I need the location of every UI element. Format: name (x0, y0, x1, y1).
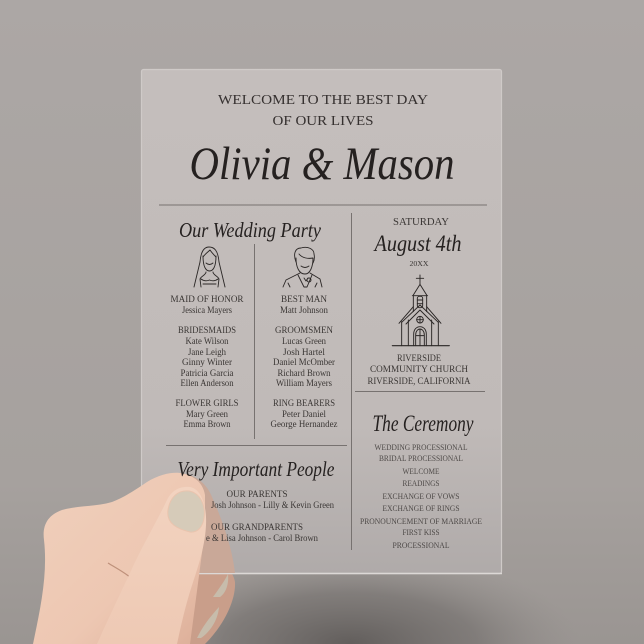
column: groom's side: Richard Brown (278, 368, 331, 378)
column: bride's side: Jessica Mayers (182, 305, 232, 315)
column: groom's side: Lucas Green (282, 336, 326, 346)
column: groom's side: Josh Hartel (283, 347, 326, 357)
heading: very important people: Very Important People (178, 457, 334, 481)
text: grandparents: OUR GRANDPARENTS (211, 522, 303, 532)
column: groom's side: BEST MAN (281, 294, 328, 304)
column: groom's side: Peter Daniel (282, 409, 326, 419)
back of hand (33, 473, 205, 644)
text: year: 20XX (410, 259, 429, 268)
column: groom's side: Matt Johnson (280, 305, 328, 315)
card shadow (120, 552, 580, 644)
text: venue: RIVERSIDE, CALIFORNIA (368, 376, 471, 386)
dividers (159, 205, 487, 550)
list: order of service: WELCOME (402, 467, 440, 476)
list: order of service: EXCHANGE OF VOWS (382, 492, 460, 501)
column: bride's side: Ellen Anderson (180, 378, 234, 388)
column: groom's side: William Mayers (276, 378, 332, 388)
fingers behind card (175, 563, 235, 644)
list: order of service: FIRST KISS (402, 528, 440, 537)
icon: groom (283, 247, 322, 287)
column: groom's side: GROOMSMEN (275, 325, 333, 335)
heading: welcome (218, 93, 428, 129)
panel: very important people (178, 457, 334, 543)
column: bride's side: Patricia Garcia (180, 368, 234, 378)
thumb (97, 487, 206, 644)
text: venue (368, 353, 471, 386)
knuckle crease (108, 563, 131, 578)
column: groom's side (270, 294, 338, 429)
column: bride's side: Ginny Winter (182, 357, 232, 367)
column: groom's side: Daniel McOmber (273, 357, 335, 367)
text: venue: COMMUNITY CHURCH (370, 364, 468, 374)
card bottom edge highlight (195, 572, 502, 574)
heading: the ceremony: The Ceremony (372, 411, 474, 436)
column: bride's side (170, 294, 244, 429)
heading: our wedding party: Our Wedding Party (179, 218, 322, 242)
icon: church (392, 275, 449, 346)
panel: the ceremony (360, 411, 482, 550)
column: bride's side: Kate Wilson (186, 336, 229, 346)
column: groom's side: George Hernandez (270, 419, 338, 429)
icon: bride (194, 247, 225, 287)
title: couple names: Olivia & Mason (190, 138, 454, 190)
acrylic card (142, 70, 502, 574)
column: bride's side: FLOWER GIRLS (176, 398, 238, 408)
column: bride's side: Emma Brown (184, 419, 231, 429)
column: groom's side: RING BEARERS (273, 398, 335, 408)
list: order of service: PROCESSIONAL (392, 541, 450, 550)
text: grandparents: e & Lisa Johnson - Carol Brown (206, 533, 318, 543)
finger seen through card (180, 473, 235, 573)
hand holding card (33, 473, 206, 644)
text: day: SATURDAY (393, 217, 449, 228)
column: bride's side: MAID OF HONOR (170, 294, 244, 304)
list: order of service (360, 443, 482, 550)
text: parents: OUR PARENTS (226, 489, 288, 499)
column: bride's side: BRIDESMAIDS (178, 325, 236, 335)
thumbnail (168, 491, 204, 532)
column: bride's side: Jane Leigh (188, 347, 226, 357)
list: order of service: READINGS (402, 479, 440, 488)
panel: wedding party (170, 218, 338, 429)
text: grandparents (206, 522, 318, 543)
column: bride's side: Mary Green (186, 409, 228, 419)
list: order of service: PRONOUNCEMENT OF MARRIAGE (360, 517, 482, 526)
heading: welcome: OF OUR LIVES (272, 114, 374, 129)
heading: date: August 4th (373, 231, 462, 256)
list: order of service: EXCHANGE OF RINGS (382, 504, 460, 513)
heading: welcome: WELCOME TO THE BEST DAY (218, 93, 428, 108)
list: order of service: WEDDING PROCESSIONAL (374, 443, 468, 452)
text: venue: RIVERSIDE (397, 353, 441, 363)
list: order of service: BRIDAL PROCESSIONAL (379, 454, 463, 463)
text: parents: Josh Johnson - Lilly & Kevin Green (211, 500, 334, 510)
panel: date and venue (368, 217, 471, 386)
text: parents (211, 489, 334, 510)
